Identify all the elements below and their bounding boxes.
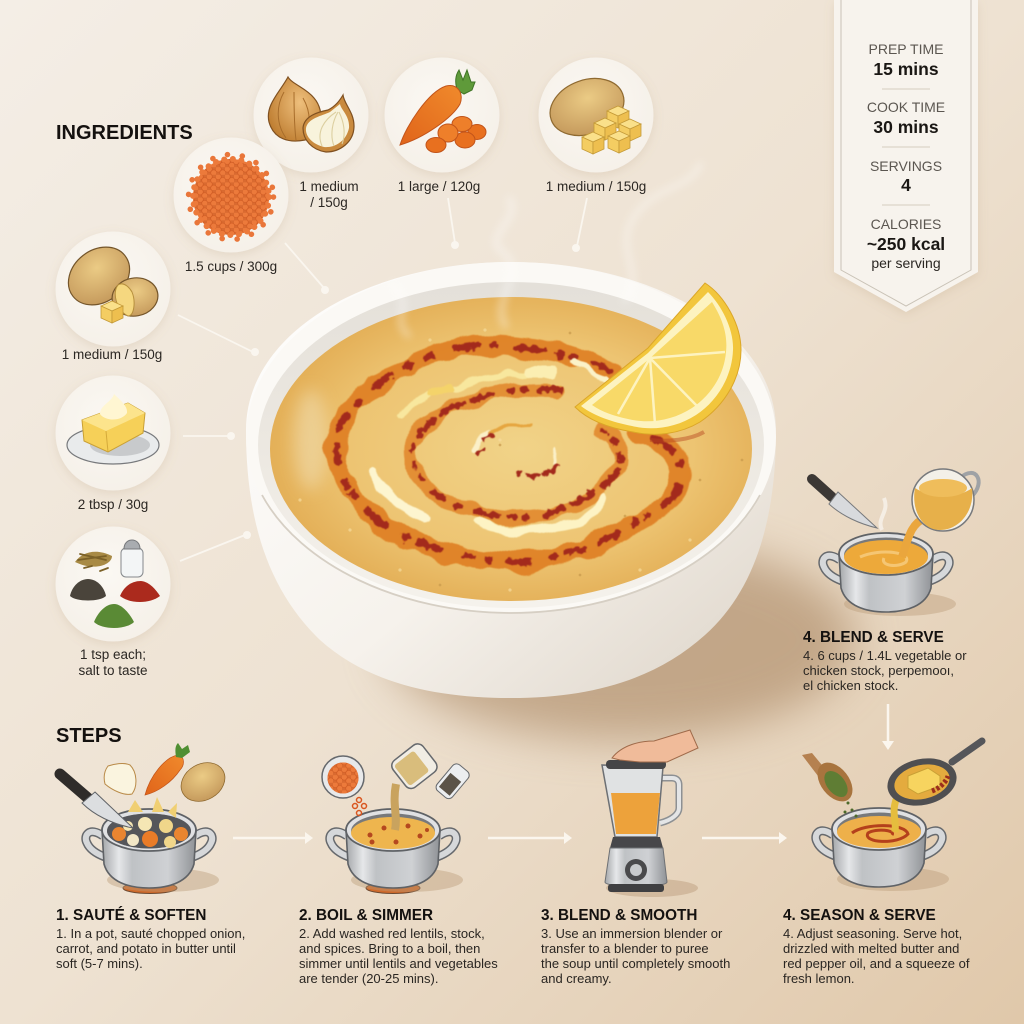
prep time: PREP TIME (869, 41, 943, 57)
step 3 text: 3. Use an immersion blender or (541, 926, 722, 941)
label: spices amount: 1 tsp each; (80, 647, 146, 662)
cook time: 30 mins (873, 117, 939, 137)
arrow: step 2 to 3 (488, 832, 572, 844)
step text: stock: el chicken stock. (803, 678, 898, 693)
ingredient: spices (56, 526, 170, 642)
info panel (834, 0, 978, 312)
step 3 text: and creamy. (541, 971, 612, 986)
ingredient: potato with cubes (538, 58, 654, 172)
calories: per serving (871, 255, 941, 271)
soup speckles (439, 332, 743, 586)
step 2 text: simmer until lentils and vegetables (299, 956, 498, 971)
label: spices amount: salt to taste (78, 663, 148, 678)
step 4 illustration: season (802, 741, 982, 891)
arrow: step 1 to 2 (233, 832, 313, 844)
chili flakes (336, 345, 681, 563)
calories: ~250 kcal (867, 234, 945, 254)
steam above soup (393, 165, 700, 335)
cream drizzle (373, 360, 606, 531)
step heading: blend and serve: 4. BLEND & SERVE (803, 629, 944, 646)
connector lines (178, 198, 587, 561)
lemon wedge (575, 283, 741, 441)
step 1 text: carrot, and potato in butter until (56, 941, 236, 956)
servings: 4 (901, 175, 911, 195)
step 4 title: 4. SEASON & SERVE (783, 907, 936, 924)
step 4 text: fresh lemon. (783, 971, 855, 986)
arrow: down (882, 704, 894, 750)
bowl inner wall (258, 282, 764, 608)
ingredient: carrot (384, 58, 500, 172)
label: potato amount: 1 medium / 150g (546, 179, 646, 194)
label: potatoes amount: 1 medium / 150g (62, 347, 162, 362)
label: lentils amount: 1.5 cups / 300g (185, 259, 277, 274)
soup surface (270, 297, 752, 601)
step 3 text: transfer to a blender to puree (541, 941, 709, 956)
illustration: knife and stock pour into pot (812, 469, 979, 616)
label: onion amount: / 150g (310, 195, 348, 210)
step 2 text: and spices. Bring to a boil, then (299, 941, 480, 956)
label: carrot amount: 1 large / 120g (398, 179, 480, 194)
oil swirl (336, 345, 681, 563)
step 4 text: red pepper oil, and a squeeze of (783, 956, 970, 971)
step text: stock: chicken stock, perpemooı, (803, 663, 954, 678)
step 2 title: 2. BOIL & SIMMER (299, 907, 433, 924)
step text: stock: 4. 6 cups / 1.4L vegetable or (803, 648, 967, 663)
step 1 title: 1. SAUTÉ & SOFTEN (56, 907, 206, 924)
ingredient: red lentils (174, 138, 288, 252)
ingredient: onion (254, 58, 368, 172)
step 2 text: 2. Add washed red lentils, stock, (299, 926, 485, 941)
heading: steps: STEPS (56, 725, 122, 747)
calories: CALORIES (871, 216, 941, 232)
cook time: COOK TIME (867, 99, 945, 115)
step 2 illustration: boil (322, 741, 471, 894)
ingredient: butter (56, 376, 170, 490)
bowl cast shadow (385, 540, 855, 740)
label: onion amount: 1 medium (299, 179, 359, 194)
step 1 text: 1. In a pot, sauté chopped onion, (56, 926, 245, 941)
step 3 title: 3. BLEND & SMOOTH (541, 907, 697, 924)
label: butter amount: 2 tbsp / 30g (78, 497, 148, 512)
servings: SERVINGS (870, 158, 942, 174)
step 1 illustration: saute (60, 743, 232, 894)
heading: ingredients: INGREDIENTS (56, 122, 193, 144)
soup bowl (246, 262, 776, 698)
step 3 text: the soup until completely smooth (541, 956, 730, 971)
ingredient: potatoes (56, 232, 170, 346)
arrow: step 3 to 4 (702, 832, 787, 844)
step 4 text: 4. Adjust seasoning. Serve hot, (783, 926, 962, 941)
step 4 text: drizzled with melted butter and (783, 941, 959, 956)
step 3 illustration: blender (602, 730, 698, 897)
prep time: 15 mins (873, 59, 939, 79)
step 2 text: are tender (20-25 mins). (299, 971, 438, 986)
step 1 text: soft (5-7 mins). (56, 956, 143, 971)
